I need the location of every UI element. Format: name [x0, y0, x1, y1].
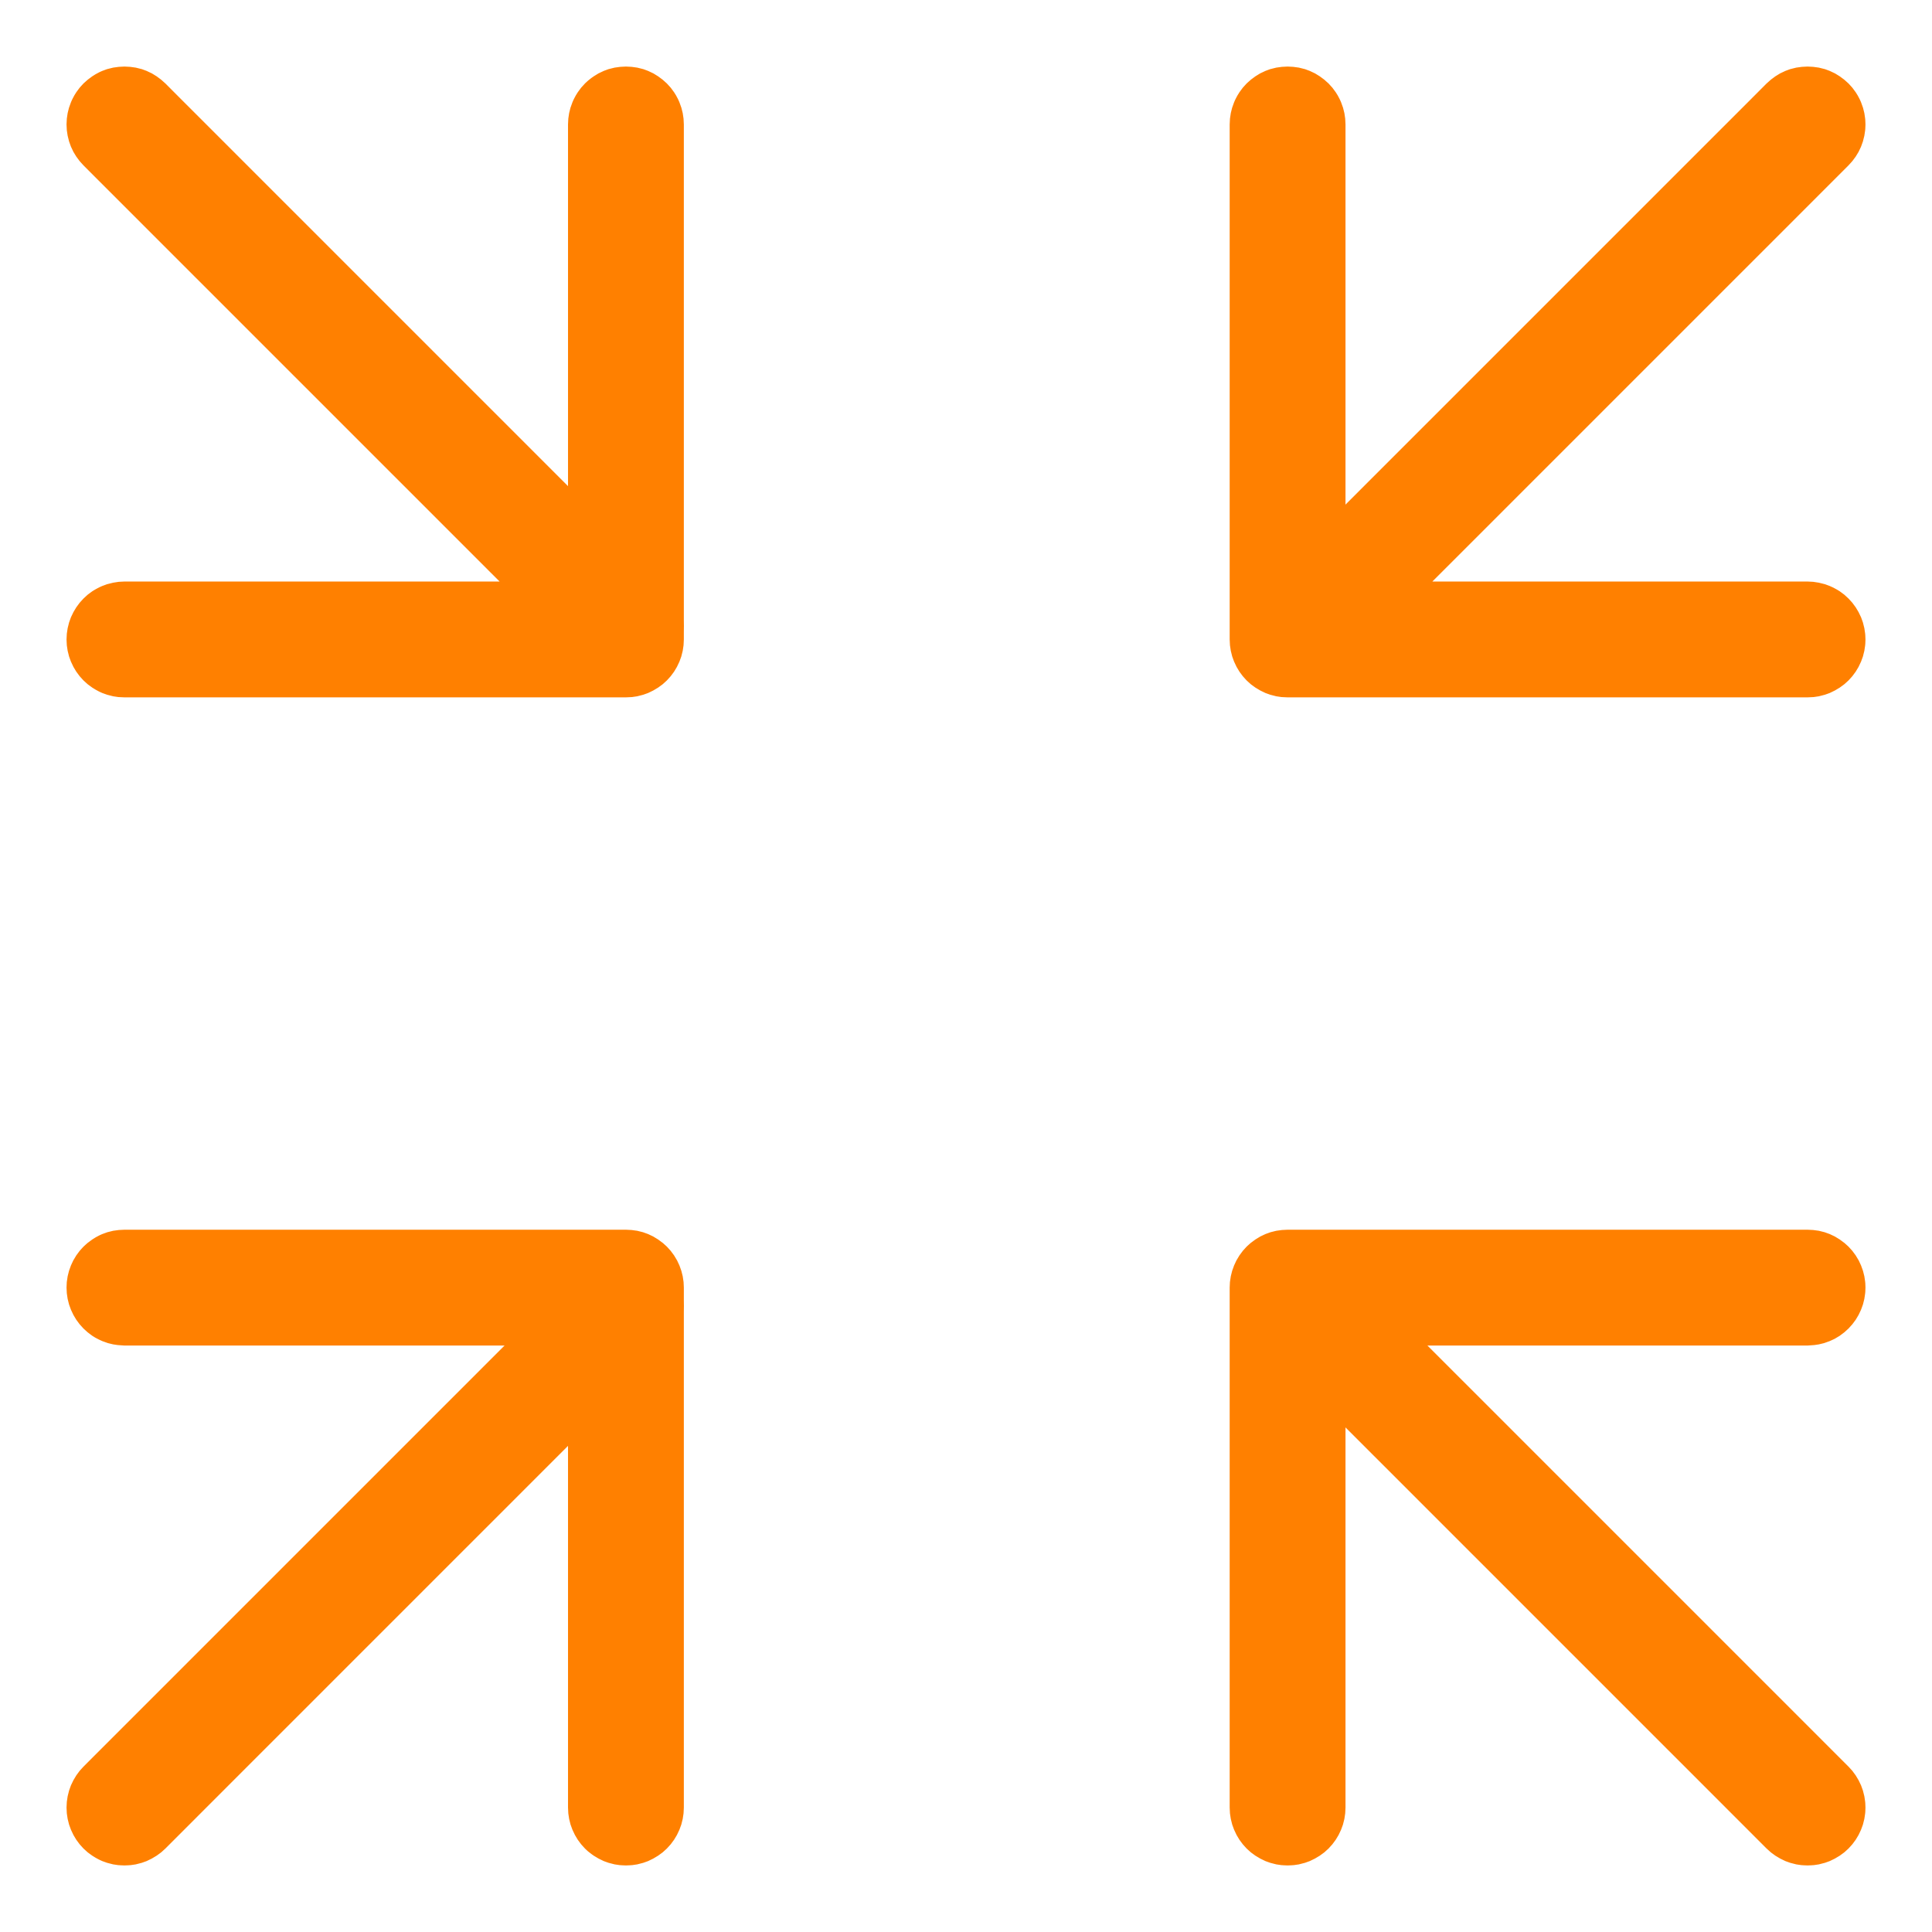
icon: bottom-right arrow — [1287, 1287, 1808, 1808]
icon: top-left arrow — [124, 124, 626, 639]
icon: top-right arrow — [1287, 124, 1808, 639]
icon: bottom-left arrow — [124, 1287, 626, 1808]
